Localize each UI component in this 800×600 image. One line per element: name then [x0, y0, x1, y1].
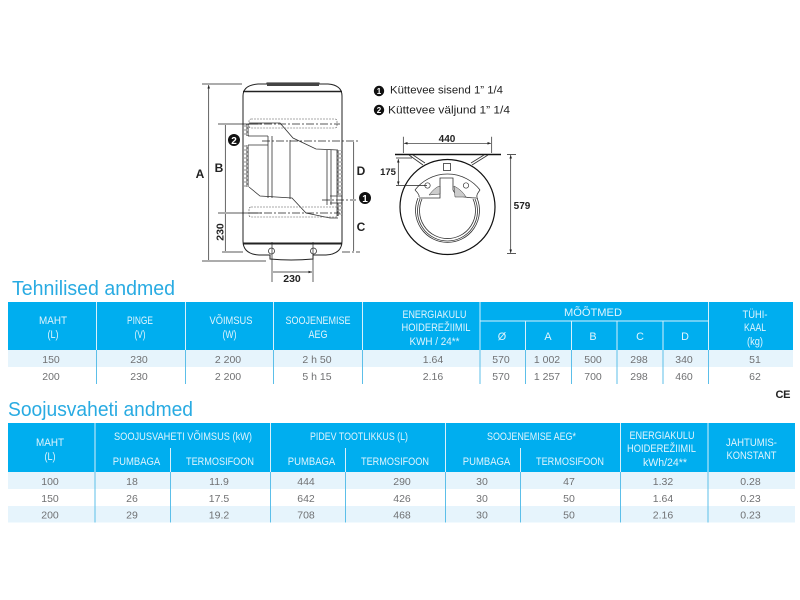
table header: (W)	[222, 329, 236, 341]
table rows: 340	[675, 354, 693, 366]
table rows: 2 h 50	[302, 354, 332, 366]
table rows: 150	[42, 354, 60, 366]
dimension 440: 440	[439, 134, 456, 145]
table header: Ø	[498, 331, 507, 343]
table rows: 29	[126, 510, 138, 522]
table rows: 290	[393, 476, 411, 488]
dimension labels: C	[357, 220, 366, 234]
table rows: 30	[476, 493, 488, 505]
table header: kWh/24**	[643, 457, 688, 469]
table rows: 700	[584, 371, 602, 383]
table rows: 30	[476, 510, 488, 522]
table rows: 100	[41, 476, 59, 488]
dimension 175	[380, 158, 427, 186]
table rows: 230	[130, 371, 148, 383]
table header: B	[589, 331, 597, 343]
heading: technical data: Tehnilised andmed	[12, 277, 175, 300]
dimension lines	[202, 84, 360, 282]
table header: PUMBAGA	[288, 456, 336, 468]
table rows: 50	[563, 493, 575, 505]
table rows: 468	[393, 510, 411, 522]
table rows: 500	[584, 354, 602, 366]
table rows: 30	[476, 476, 488, 488]
table header: (L)	[48, 329, 58, 341]
table rows: 2.16	[423, 371, 443, 383]
table header: TERMOSIFOON	[536, 456, 604, 468]
table header: TERMOSIFOON	[186, 456, 254, 468]
table header: SOOJENEMISE	[286, 315, 350, 327]
table header: MAHT	[36, 437, 64, 449]
table rows: 19.2	[209, 510, 229, 522]
table header: TERMOSIFOON	[361, 456, 429, 468]
table rows: 5 h 15	[302, 371, 332, 383]
dimension labels: A	[196, 167, 205, 181]
dimension 440	[403, 134, 492, 153]
table header: SOOJENEMISE AEG*	[487, 431, 577, 443]
table header: (L)	[44, 451, 56, 463]
table rows: 150	[41, 493, 59, 505]
table rows: 0.28	[740, 476, 761, 488]
table header: (V)	[134, 329, 146, 341]
table rows: 11.9	[209, 476, 229, 488]
table rows: 1 257	[534, 371, 560, 383]
table rows: 18	[126, 476, 138, 488]
table rows: 200	[42, 371, 60, 383]
table header: TÜHI-	[742, 309, 768, 321]
tank body	[243, 83, 342, 260]
table header: PINGE	[127, 315, 153, 327]
table rows: 298	[630, 371, 648, 383]
marker 1: 1	[362, 194, 368, 205]
table rows: 460	[675, 371, 693, 383]
marker 1	[359, 192, 371, 205]
table header: JAHTUMIS-	[726, 437, 777, 449]
dimension 175: 175	[380, 167, 397, 178]
table rows: 2 200	[215, 371, 241, 383]
CE mark: CE	[776, 389, 790, 401]
table rows: 1.64	[653, 493, 673, 505]
table rows: 0.23	[740, 493, 761, 505]
table rows: 200	[41, 510, 59, 522]
legend item 1: Küttevee sisend 1” 1/4	[390, 84, 503, 96]
table rows: 570	[492, 371, 510, 383]
table header: ENERGIAKULU	[630, 430, 694, 442]
table header: ENERGIAKULU	[402, 309, 466, 321]
heat exchanger coil	[244, 119, 342, 218]
table header: KONSTANT	[726, 450, 777, 462]
table rows: 298	[630, 354, 648, 366]
table: heat exchanger data	[8, 423, 795, 522]
table rows: 426	[393, 493, 411, 505]
table header: C	[636, 331, 644, 343]
table: technical data	[8, 302, 793, 384]
marker 2	[228, 134, 240, 147]
table header: PUMBAGA	[463, 456, 511, 468]
table header: A	[544, 331, 552, 343]
table header: VÕIMSUS	[210, 314, 252, 327]
table rows: 0.23	[740, 510, 761, 522]
table rows: 17.5	[209, 493, 229, 505]
table rows: 2 200	[215, 354, 241, 366]
table header: HOIDEREŽIIMIL	[402, 321, 470, 334]
table header: (kg)	[747, 336, 763, 348]
table rows: 47	[563, 476, 575, 488]
table rows: 2.16	[653, 510, 673, 522]
table header: AEG	[308, 329, 328, 341]
table rows: 1 002	[534, 354, 560, 366]
legend	[374, 84, 510, 116]
legend item 1: 1	[377, 87, 382, 96]
table rows: 50	[563, 510, 575, 522]
table header: HOIDEREŽIIMIL	[627, 442, 696, 455]
table rows: 62	[749, 371, 761, 383]
table header	[8, 423, 795, 472]
legend item 2: 2	[377, 106, 382, 115]
dimension 579: 579	[514, 201, 531, 212]
table rows: 708	[297, 510, 315, 522]
heading: heat exchanger data: Soojusvaheti andmed	[8, 398, 193, 421]
wall plate and brackets	[395, 154, 501, 165]
table rows	[8, 472, 795, 522]
table header: KAAL	[744, 322, 766, 334]
table header: MÕÕTMED	[564, 306, 622, 319]
tank outline	[400, 160, 495, 254]
marker 2: 2	[231, 136, 237, 147]
table header: KWH / 24**	[410, 336, 460, 348]
legend item 2: Küttevee väljund 1” 1/4	[388, 104, 510, 116]
table rows	[8, 350, 793, 384]
table rows: 642	[297, 493, 315, 505]
dimension 579	[507, 154, 531, 254]
table header	[8, 302, 793, 350]
front view diagram of water heater	[196, 83, 371, 285]
table header: D	[681, 331, 689, 343]
table rows: 570	[492, 354, 510, 366]
table rows: 230	[130, 354, 148, 366]
dimension labels: D	[357, 164, 366, 178]
table rows: 26	[126, 493, 138, 505]
table header: SOOJUSVAHETI VÕIMSUS (kW)	[114, 430, 252, 443]
table rows: 1.32	[653, 476, 673, 488]
table rows: 444	[297, 476, 315, 488]
dimension labels: 230	[283, 273, 301, 285]
table rows: 51	[749, 354, 761, 366]
dimension labels: 230	[214, 223, 226, 241]
table rows: 1.64	[423, 354, 443, 366]
dimension labels	[196, 161, 366, 285]
top view diagram of water heater	[380, 134, 531, 254]
table header: MAHT	[39, 315, 67, 327]
table header: PIDEV TOOTLIKKUS (L)	[310, 431, 408, 443]
dimension labels: B	[215, 161, 224, 175]
table header: PUMBAGA	[113, 456, 161, 468]
